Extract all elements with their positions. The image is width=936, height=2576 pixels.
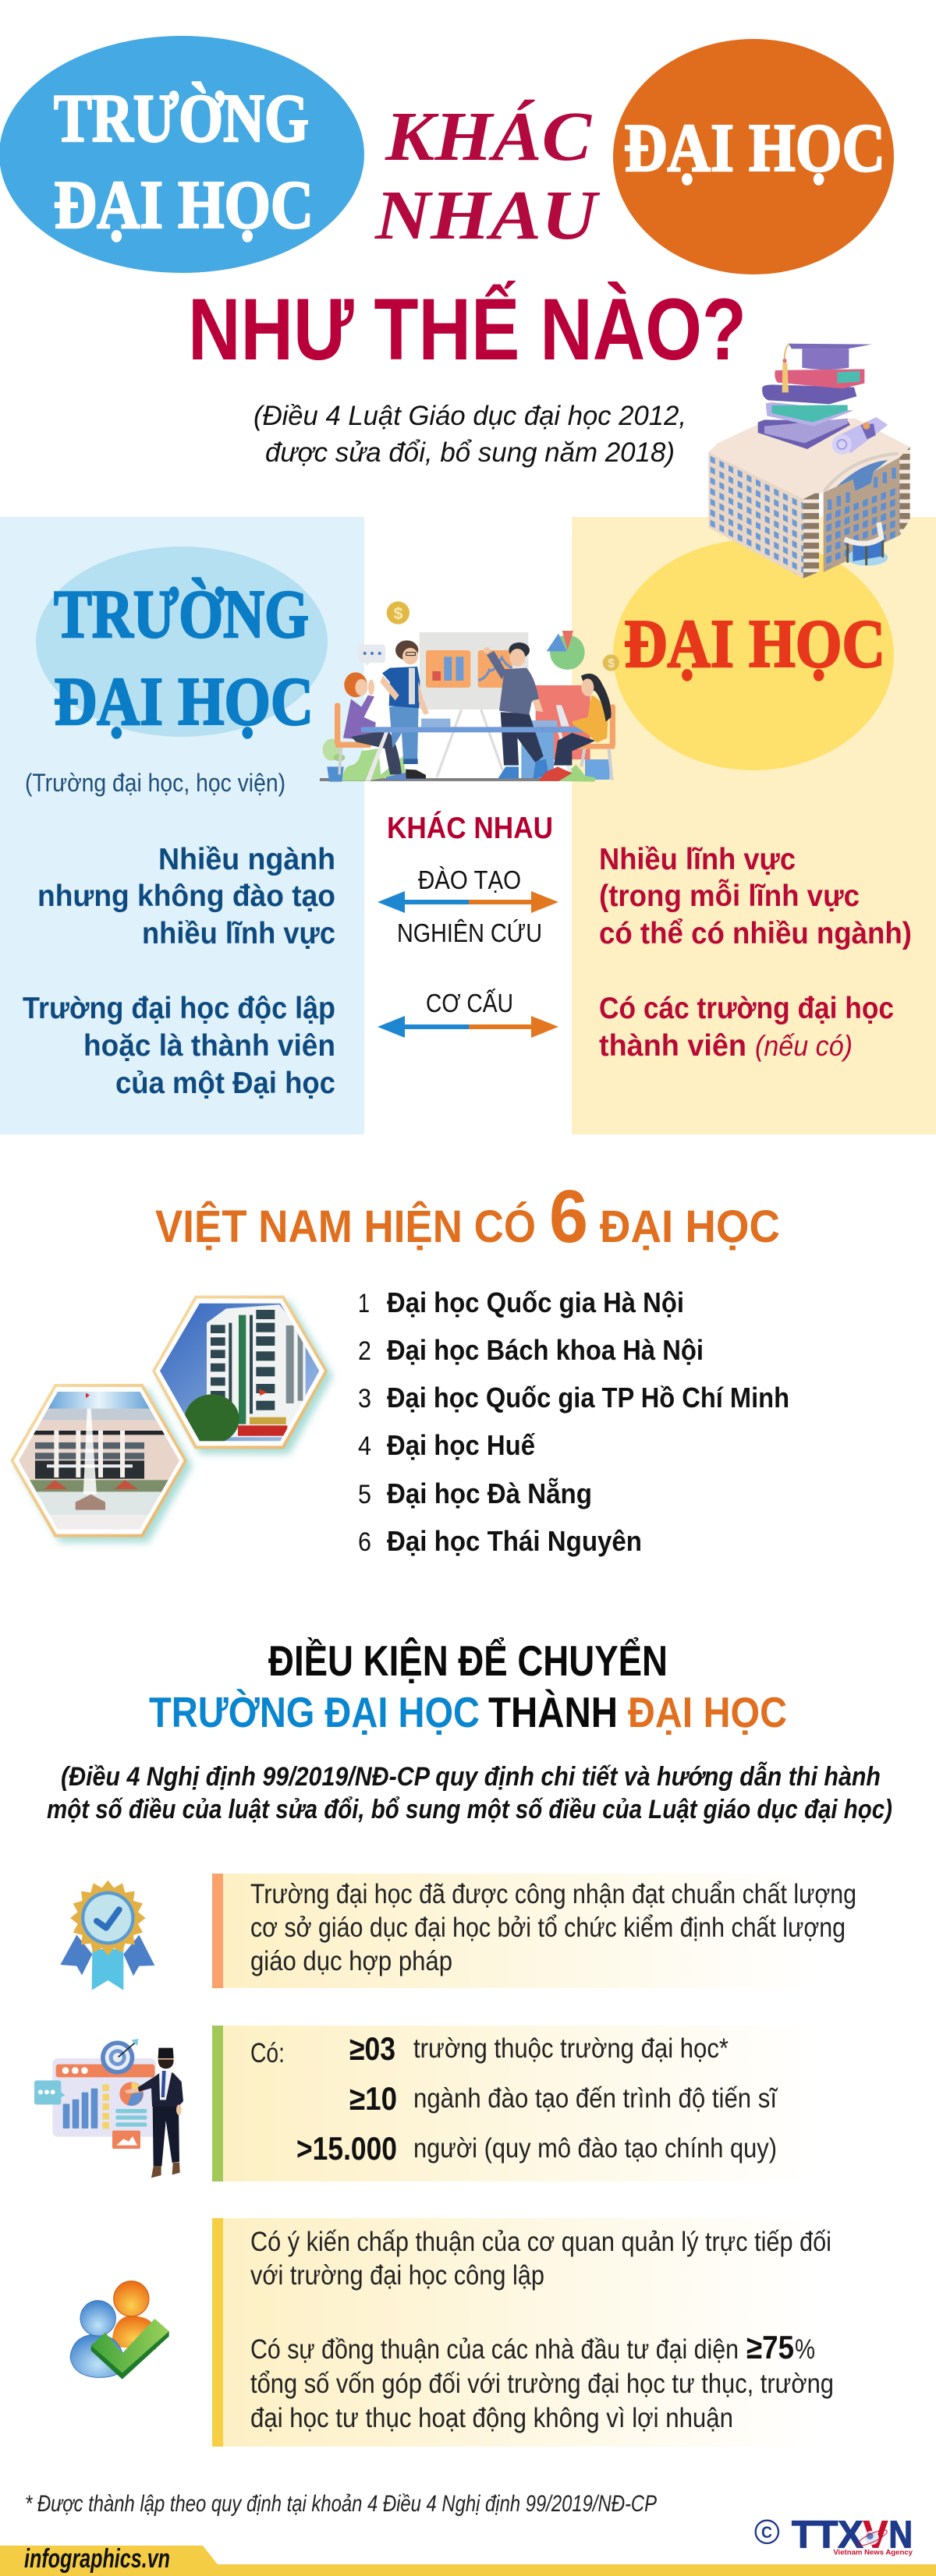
note: trường đại học, học viện: (Trường đại học, học viện)	[25, 769, 285, 797]
text: nhiều lĩnh vực	[599, 843, 912, 950]
arrow: cơ cấu	[378, 1016, 558, 1038]
condition 3: approval and consensus	[212, 2218, 834, 2447]
text: nhiều lĩnh vực: (trong mỗi lĩnh vực	[599, 879, 860, 913]
photo: building with fountain	[10, 1384, 193, 1542]
text: nhiều ngành	[37, 843, 335, 950]
label: khác nhau: KHÁC NHAU	[387, 811, 553, 845]
top circle: Trường đại học: TRƯỜNG	[54, 81, 309, 157]
top circle: Trường đại học: ĐẠI HỌC	[54, 168, 314, 243]
criterion: quy mô đào tạo: người (quy mô đào tạo chính quy)	[413, 2133, 777, 2164]
condition 3: approval and consensus: đại học tư thục hoạt động không vì lợi nhuận	[250, 2403, 733, 2433]
icon: small coin	[603, 654, 619, 671]
photo: building with green column	[152, 1296, 333, 1454]
footnote: * Được thành lập theo quy định tại khoản 4 Điều 4 Nghị định 99/2019/NĐ-CP	[25, 2491, 657, 2517]
icon: coin: $	[394, 604, 403, 623]
furniture behind team	[421, 685, 610, 780]
text: trường đại học độc lập: Trường đại học độc lập	[23, 992, 335, 1025]
list item 2: Đại học Bách khoa Hà Nội	[387, 1334, 704, 1366]
top circle: Trường đại học	[0, 36, 364, 273]
text: có các trường đại học: (nếu có)	[755, 1030, 853, 1062]
logo: TTXVN: V	[863, 2513, 888, 2556]
condition 3: approval and consensus: Có ý kiến chấp thuận của cơ quan quản lý trực tiếp đối	[250, 2227, 831, 2257]
condition 1: accreditation: cơ sở giáo dục đại học bởi tổ chức kiểm định chất lượng	[250, 1913, 846, 1943]
list item 5: 5	[358, 1480, 371, 1509]
icon: dashboard with businessman	[34, 2039, 183, 2178]
logo: TTXVN: C	[761, 2523, 772, 2542]
heading circle: trường đại học: TRƯỜNG	[54, 577, 309, 653]
heading: việt nam hiện có 6 đại học	[155, 1175, 780, 1258]
condition 2: numeric criteria	[212, 2026, 815, 2181]
label: đào tạo: ĐÀO TẠO	[418, 865, 521, 894]
list item 4: 4	[358, 1431, 371, 1461]
heading: điều kiện để chuyển: THÀNH	[488, 1688, 618, 1736]
heading: điều kiện để chuyển: ĐIỀU KIỆN ĐỂ CHUYỂN	[268, 1637, 668, 1685]
heading circle: đại học	[613, 540, 894, 770]
illustration: university building with books	[708, 344, 910, 579]
logo: TTXVN	[756, 2513, 913, 2557]
heading: việt nam hiện có 6 đại học: ĐẠI HỌC	[600, 1201, 780, 1252]
top circle: Đại học: ĐẠI HỌC	[624, 111, 885, 186]
list item 1: 1	[358, 1289, 370, 1318]
criterion: ngành đào tạo	[349, 2080, 778, 2117]
list item 5: Đại học Đà Nẵng	[387, 1477, 592, 1509]
condition 3: approval and consensus: Có sự đồng thuận của các nhà đầu tư đại diện	[250, 2334, 739, 2365]
condition 3: approval and consensus: ≥75	[746, 2329, 794, 2365]
text: có các trường đại học: Có các trường đại học	[599, 992, 894, 1025]
list item 6: 6	[358, 1527, 371, 1557]
criterion: trường thuộc: ≥03	[349, 2030, 395, 2067]
heading circle: đại học: ĐẠI HỌC	[624, 607, 885, 682]
label: cơ cấu: CƠ CẤU	[426, 989, 513, 1017]
criterion: quy mô đào tạo: >15.000	[296, 2130, 397, 2167]
heading: điều kiện để chuyển: ĐẠI HỌC	[628, 1688, 787, 1736]
table	[361, 727, 587, 781]
condition 1: accreditation	[212, 1874, 856, 1988]
text: nhiều lĩnh vực: Nhiều lĩnh vực	[599, 843, 796, 876]
text: trường đại học độc lập: của một Đại học	[115, 1067, 335, 1100]
presentation board	[420, 632, 528, 777]
label: nghiên cứu: NGHIÊN CỨU	[397, 918, 542, 947]
illustration: team meeting around a table	[320, 601, 619, 782]
icon: pie chart	[547, 631, 585, 670]
text: có các trường đại học: thành viên	[599, 1029, 746, 1063]
list item 3: Đại học Quốc gia TP Hồ Chí Minh	[387, 1382, 789, 1414]
logo: TTXVN: Vietnam News Agency	[833, 2549, 913, 2557]
list item 2: 2	[358, 1336, 371, 1366]
list: 6 đại học	[358, 1286, 789, 1557]
text: trường đại học độc lập: hoặc là thành viên	[83, 1029, 335, 1063]
person: seated woman left	[335, 672, 425, 780]
ground and plants	[320, 739, 595, 782]
photo hexagons: university buildings	[10, 1296, 333, 1542]
criterion: ngành đào tạo: ≥10	[349, 2080, 397, 2117]
person: standing man in blue shirt	[380, 640, 429, 779]
text: nhiều ngành: nhiều lĩnh vực	[142, 917, 335, 950]
legal reference: nghị định 99/2019	[47, 1762, 892, 1824]
icon: two people with green check	[70, 2281, 169, 2380]
legal reference subtitle	[254, 401, 686, 468]
text: nhiều ngành: Nhiều ngành	[158, 843, 335, 876]
criterion: quy mô đào tạo	[296, 2130, 777, 2167]
icon: medal with check mark	[60, 1881, 154, 1990]
text: nhiều lĩnh vực: có thể có nhiều ngành)	[599, 917, 912, 950]
title: khác nhau: KHÁC	[385, 98, 592, 175]
icon: speech bubble	[358, 645, 385, 666]
logo: TTXVN: TTX	[792, 2513, 863, 2556]
text: nhiều ngành: nhưng không đào tạo	[37, 879, 335, 913]
icon: small coin: $	[608, 657, 615, 671]
icon: coin	[387, 601, 410, 625]
heading circle: trường đại học: ĐẠI HỌC	[54, 664, 314, 740]
legal reference subtitle: được sửa đổi, bổ sung năm 2018)	[265, 437, 675, 468]
legal reference subtitle: (Điều 4 Luật Giáo dục đại học 2012,	[254, 401, 686, 431]
title: khác nhau: NHAU	[374, 177, 600, 254]
condition 3: approval and consensus: với trường đại học công lập	[250, 2260, 544, 2291]
heading: điều kiện để chuyển: TRƯỜNG ĐẠI HỌC	[149, 1688, 480, 1736]
list item 4: Đại học Huế	[387, 1429, 536, 1461]
panel: trường đại học	[0, 517, 364, 1134]
text: có: Có:	[250, 2038, 285, 2068]
condition 1: accreditation: Trường đại học đã được công nhận đạt chuẩn chất lượng	[250, 1879, 856, 1909]
top circle: Đại học	[613, 39, 894, 274]
condition 3: approval and consensus: tổng số vốn góp đối với trường đại học tư thục, trường	[250, 2369, 834, 2399]
condition 3: approval and consensus: %	[795, 2334, 815, 2365]
criterion: ngành đào tạo: ngành đào tạo đến trình độ tiến sĩ	[413, 2083, 778, 2114]
text: có các trường đại học	[599, 992, 894, 1063]
heading: việt nam hiện có 6 đại học: 6	[549, 1175, 588, 1258]
title: khác nhau	[374, 98, 600, 254]
criterion: trường thuộc	[349, 2030, 729, 2067]
heading: việt nam hiện có 6 đại học: VIỆT NAM HIỆN CÓ	[155, 1201, 536, 1252]
heading: điều kiện để chuyển	[149, 1637, 787, 1736]
heading circle: trường đại học	[36, 547, 328, 740]
footer bar with source	[0, 2544, 936, 2576]
list item 6: Đại học Thái Nguyên	[387, 1525, 642, 1557]
list item 3: 3	[358, 1384, 371, 1414]
criterion: trường thuộc: trường thuộc trường đại học*	[413, 2033, 729, 2064]
person: man presenting	[484, 642, 548, 779]
person: seated woman right	[538, 674, 615, 781]
list item 1: Đại học Quốc gia Hà Nội	[387, 1286, 684, 1318]
title: như thế nào: NHƯ THẾ NÀO?	[188, 281, 746, 378]
panel: đại học	[572, 517, 936, 1134]
text: trường đại học độc lập	[23, 992, 335, 1100]
condition 1: accreditation: giáo dục hợp pháp	[250, 1946, 452, 1976]
arrow: đào tạo, nghiên cứu	[378, 891, 558, 913]
footer bar with source: infographics.vn	[24, 2544, 170, 2574]
logo: TTXVN: N	[888, 2513, 913, 2556]
